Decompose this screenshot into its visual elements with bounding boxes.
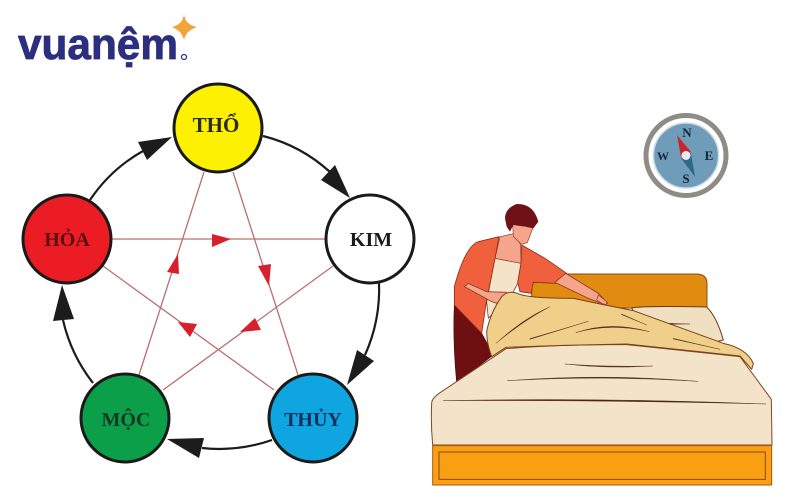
woman arms <box>464 273 608 304</box>
woman top <box>487 258 521 318</box>
woman cardigan <box>454 237 567 333</box>
node: MOC <box>81 374 169 462</box>
node: HOA: HỎA <box>44 228 90 251</box>
node: THO: THỔ <box>193 113 239 137</box>
black cycle arcs <box>63 136 379 449</box>
icon: compass: E <box>705 148 713 163</box>
icon: compass: N <box>682 125 692 140</box>
node: KIM <box>326 195 414 283</box>
bed headboard <box>532 274 707 309</box>
illustration: woman making bed <box>431 204 772 485</box>
node: THUY <box>269 374 357 462</box>
pillow <box>632 307 723 347</box>
woman fingers over blanket <box>597 295 607 305</box>
icon: compass: W <box>657 149 669 163</box>
woman neck and chest <box>495 233 521 263</box>
bed base <box>433 446 772 485</box>
node: KIM: KIM <box>350 229 392 251</box>
icon: compass: S <box>682 171 690 186</box>
red star arrowheads <box>167 234 271 337</box>
mattress <box>431 345 772 445</box>
node: HOA <box>23 195 111 283</box>
woman hair and face <box>505 204 538 244</box>
node: MOC: MỘC <box>102 408 150 431</box>
wrinkles <box>443 307 766 404</box>
red star lines <box>103 172 333 390</box>
five elements cycle diagram <box>23 84 414 462</box>
blanket <box>487 292 753 369</box>
black cycle arrowheads <box>53 137 374 458</box>
woman legs <box>454 305 493 383</box>
node: THO <box>174 84 262 172</box>
logo: vuanem: vuanệm <box>18 20 178 69</box>
icon: compass <box>646 116 726 196</box>
node: THUY: THỦY <box>284 408 342 431</box>
